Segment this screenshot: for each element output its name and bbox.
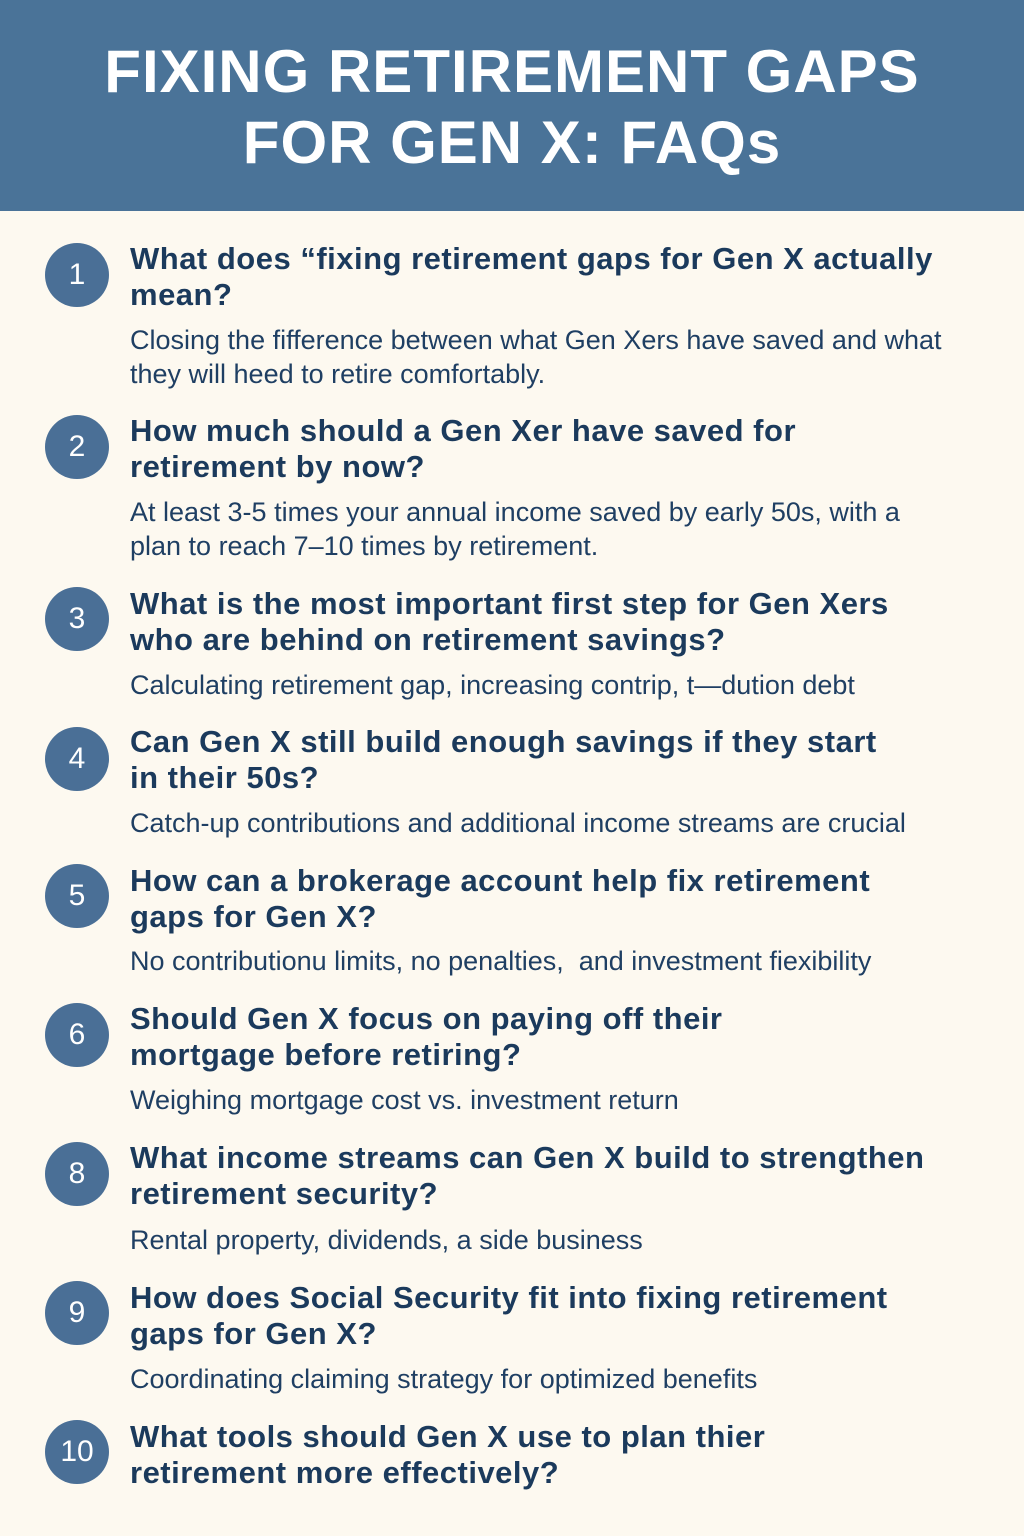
answer 2: At least 3-5 times your annual income saved by early 50s, with a [130, 497, 900, 527]
question 1: What does “fixing retirement gaps for Gen X actually [130, 241, 933, 276]
number 4: 4 [69, 742, 85, 775]
question 10 [130, 1419, 765, 1490]
question 6: Should Gen X focus on paying off their [130, 1001, 722, 1036]
number 2 [45, 415, 109, 479]
answer 2 [130, 497, 900, 561]
faq 9 [45, 1280, 888, 1394]
number 10 [45, 1420, 109, 1484]
number 2: 2 [69, 430, 85, 463]
number 8 [45, 1142, 109, 1206]
faq 1 [45, 241, 942, 389]
number 9 [45, 1281, 109, 1345]
question 3: who are behind on retirement savings? [130, 622, 726, 657]
question 3 [130, 586, 889, 657]
number 6 [45, 1003, 109, 1067]
number 4 [45, 727, 109, 791]
title [104, 38, 920, 176]
answer 5: No contributionu limits, no penalties, and investment fiexibility [130, 946, 871, 976]
question 9 [130, 1280, 888, 1351]
number 9: 9 [69, 1296, 85, 1329]
faq 5 [45, 863, 872, 976]
question 9: How does Social Security fit into fixing retirement [130, 1280, 888, 1315]
faq 4 [45, 724, 906, 838]
number 5: 5 [69, 879, 85, 912]
number 3 [45, 587, 109, 651]
answer 1: Closing the fifference between what Gen Xers have saved and what [130, 325, 942, 355]
faq 8 [45, 1140, 924, 1255]
question 3: What is the most important first step for Gen Xers [130, 586, 889, 621]
answer 2: plan to reach 7–10 times by retirement. [130, 531, 598, 561]
question 8 [130, 1140, 924, 1211]
answer 4: Catch-up contributions and additional income streams are crucial [130, 808, 906, 838]
question 6 [130, 1001, 722, 1072]
question 2 [130, 413, 796, 484]
number 3: 3 [69, 602, 85, 635]
faq 6 [45, 1001, 722, 1115]
question 9: gaps for Gen X? [130, 1316, 377, 1351]
question 4 [130, 724, 877, 795]
faq 2 [45, 413, 900, 561]
answer 1: they will heed to retire comfortably. [130, 359, 545, 389]
question 2: How much should a Gen Xer have saved for [130, 413, 796, 448]
question 10: What tools should Gen X use to plan thier [130, 1419, 765, 1454]
answer 1 [130, 325, 942, 389]
question 5: gaps for Gen X? [130, 899, 377, 934]
question 4: in their 50s? [130, 760, 319, 795]
question 8: retirement security? [130, 1176, 438, 1211]
answer 9: Coordinating claiming strategy for optimized benefits [130, 1364, 757, 1394]
title: FIXING RETIREMENT GAPS [104, 38, 920, 105]
number 8: 8 [69, 1157, 85, 1190]
question 4: Can Gen X still build enough savings if they start [130, 724, 877, 759]
answer 8: Rental property, dividends, a side business [130, 1225, 643, 1255]
question 5: How can a brokerage account help fix retirement [130, 863, 870, 898]
number 5 [45, 864, 109, 928]
number 1 [45, 243, 109, 307]
number 10: 10 [60, 1435, 94, 1468]
number 1: 1 [69, 258, 85, 291]
title: FOR GEN X: FAQs [243, 109, 781, 176]
number 6: 6 [69, 1018, 85, 1051]
header [0, 0, 1024, 211]
question 2: retirement by now? [130, 449, 425, 484]
question 8: What income streams can Gen X build to strengthen [130, 1140, 924, 1175]
faq 3 [45, 586, 889, 700]
answer 3: Calculating retirement gap, increasing contrip, t—dution debt [130, 670, 855, 700]
faq 10 [45, 1419, 765, 1490]
question 6: mortgage before retiring? [130, 1037, 521, 1072]
question 1: mean? [130, 277, 232, 312]
question 5 [130, 863, 870, 934]
answer 6: Weighing mortgage cost vs. investment return [130, 1085, 679, 1115]
question 10: retirement more effectively? [130, 1455, 559, 1490]
question 1 [130, 241, 933, 312]
